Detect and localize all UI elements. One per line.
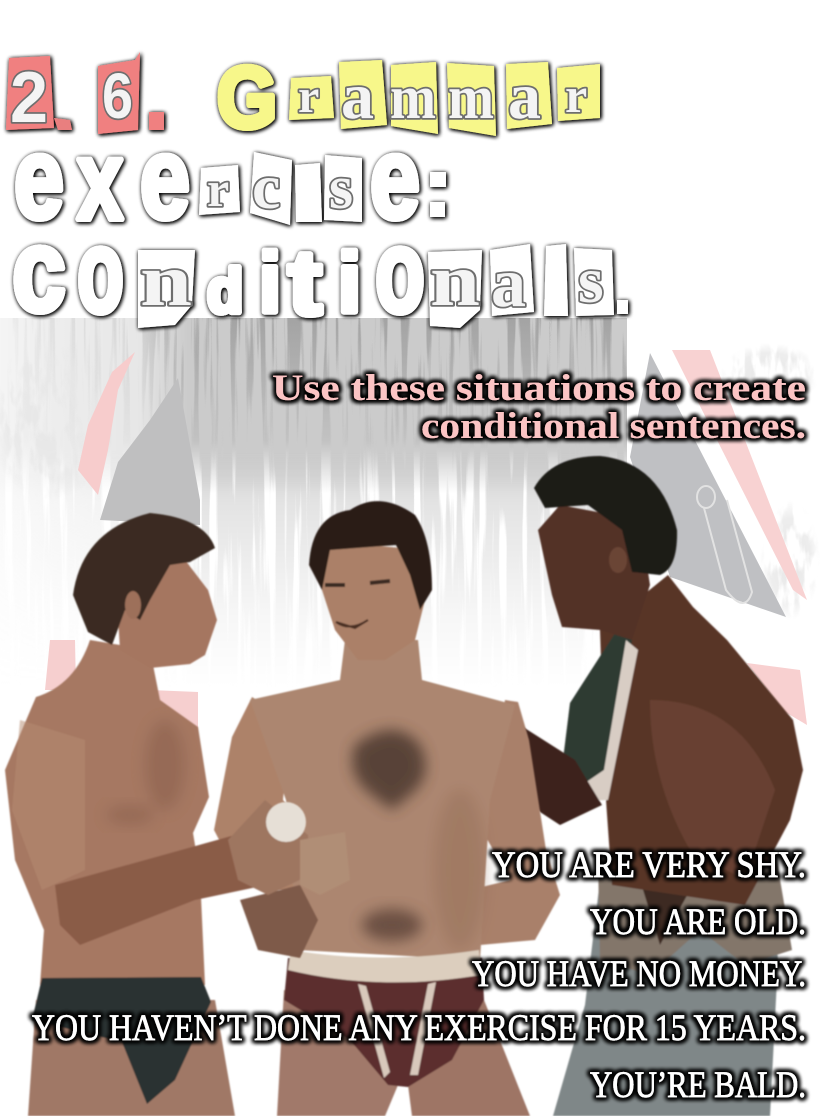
title line 3: conditionals.: n [430, 240, 480, 322]
briefs [284, 958, 484, 1087]
title line 1: 2.6.: 6 [102, 60, 133, 132]
hand [384, 696, 486, 760]
legs [28, 1000, 235, 1116]
forearm [490, 720, 602, 825]
subtitle: Use these situations to create [272, 368, 806, 409]
briefs [32, 977, 211, 1104]
title line 3: conditionals.: i [259, 236, 281, 330]
title line 2: exercise:: r [207, 161, 229, 217]
title line 1: Grammar: m [448, 64, 494, 132]
title line 3: conditionals.: i [338, 236, 361, 330]
title line 1: Grammar: G [217, 50, 277, 146]
title line 3: conditionals. [12, 205, 628, 338]
title line 2: exercise:: e [14, 113, 64, 243]
hair [309, 501, 432, 610]
title line 1: Grammar [217, 50, 600, 146]
eyes [325, 581, 390, 585]
upper hand [228, 800, 310, 895]
title: ransom-note lettering [6, 50, 628, 338]
title line 3: conditionals.: d [207, 257, 243, 326]
title line 2: exercise:: x [77, 118, 123, 243]
face [115, 560, 217, 668]
title line 2: exercise:: c [252, 151, 280, 222]
title line 1: Grammar: a [508, 60, 541, 133]
title line 1: 2.6. [6, 52, 164, 138]
hair [534, 456, 677, 575]
arms [214, 697, 350, 895]
figure: man on the right [384, 456, 803, 1116]
figure: man in the centre [214, 501, 560, 1116]
torso [250, 640, 515, 960]
title line 2: exercise:: s [329, 154, 353, 222]
background: grey grunge band [0, 318, 815, 617]
face [538, 505, 650, 640]
list of situations [32, 845, 806, 1106]
figure: man on the left [5, 513, 350, 1116]
title line 1: Grammar: a [341, 60, 374, 133]
torso and shoulder [600, 575, 803, 905]
ear [609, 547, 627, 573]
trousers [553, 870, 778, 1116]
chest hair [352, 730, 426, 810]
lower hand [240, 885, 318, 958]
title line 1: Grammar: r [565, 67, 587, 123]
torso [5, 640, 209, 985]
towel [558, 630, 632, 800]
title line 2: exercise: [14, 113, 446, 243]
belly hair [362, 909, 422, 941]
icon: safety pin [697, 486, 752, 603]
legs [277, 990, 398, 1116]
title line 3: conditionals.: a [491, 245, 526, 322]
mouth [336, 620, 368, 628]
background: torn flag with safety pin on the right [630, 350, 807, 725]
forearm [55, 835, 290, 945]
ear [125, 591, 141, 619]
title line 1: Grammar: m [390, 64, 436, 132]
subtitle: conditional sentences. [421, 406, 806, 447]
title line 3: conditionals.: s [578, 244, 604, 317]
title line 3: conditionals.: o [77, 206, 124, 338]
title line 3: conditionals.: c [12, 205, 66, 337]
background: torn flag on the left [45, 352, 200, 735]
title line 3: conditionals.: t [288, 232, 322, 334]
waistband [288, 950, 481, 982]
baseball [266, 802, 306, 842]
fist [300, 832, 350, 895]
title line 2: exercise:: e [370, 113, 420, 243]
title line 3: conditionals.: n [140, 240, 192, 322]
neck and face [320, 540, 425, 660]
title line 1: Grammar: r [298, 70, 319, 123]
title line 2: exercise:: e [140, 113, 190, 243]
title line 3: conditionals.: o [375, 206, 425, 338]
hair [73, 513, 215, 645]
subtitle [272, 368, 806, 447]
wristband [470, 713, 513, 770]
title line 1: 2.6.: 2 [10, 58, 48, 138]
